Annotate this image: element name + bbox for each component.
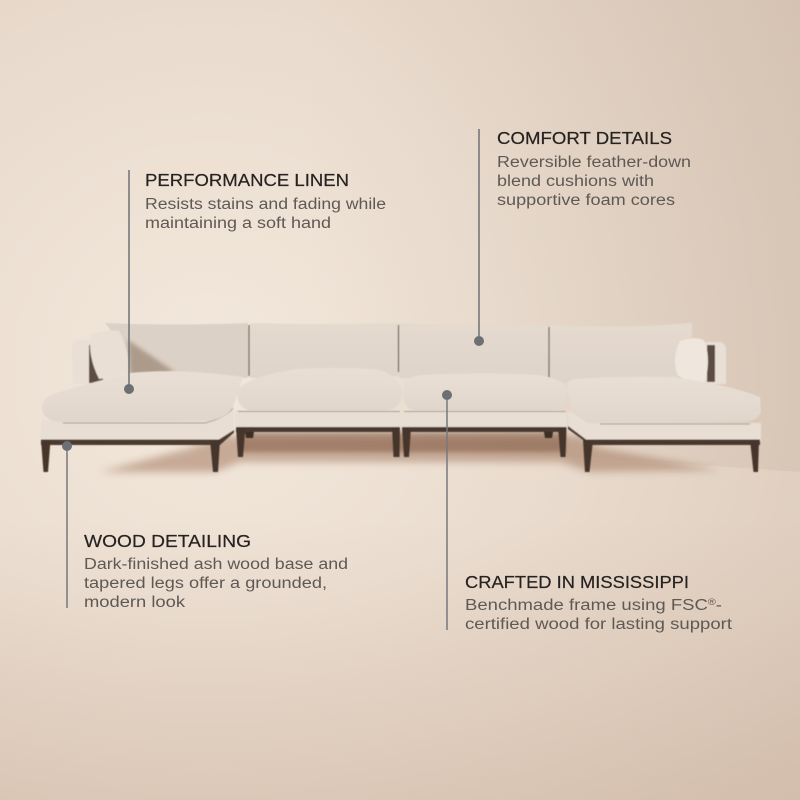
- seat shadow seams: [63, 408, 750, 424]
- seat: left chaise: [42, 371, 243, 422]
- body text: [465, 597, 733, 633]
- base: right chaise: [568, 410, 761, 441]
- right pillow: [675, 338, 708, 382]
- left pillow: [90, 330, 128, 379]
- body text: Reversible feather-down: [497, 154, 691, 171]
- body text: ®: [708, 597, 716, 607]
- callout: wood detailing: [62, 441, 348, 611]
- seat: left middle: [237, 368, 402, 410]
- leader line and dot: [474, 129, 484, 346]
- body text: Resists stains and fading while: [145, 196, 386, 213]
- wood rails: [41, 430, 234, 445]
- body text: [145, 196, 386, 232]
- right arm: [706, 342, 726, 384]
- left arm: [72, 339, 94, 384]
- leader line and dot: [442, 390, 452, 630]
- body text: -: [716, 597, 722, 614]
- heading: PERFORMANCE LINEN: [145, 170, 349, 190]
- body text: blend cushions with: [497, 173, 654, 190]
- back cushion seams: [249, 325, 549, 378]
- body text: [497, 154, 691, 209]
- base: left chaise: [41, 408, 234, 441]
- seat: right middle: [403, 374, 568, 410]
- heading: COMFORT DETAILS: [497, 128, 672, 148]
- body text: supportive foam cores: [497, 192, 675, 209]
- shadow on left back cushion: [128, 340, 175, 378]
- base: middle modules: [235, 410, 401, 428]
- sofa: [41, 323, 761, 472]
- body text: modern look: [84, 594, 185, 611]
- seat: right chaise: [567, 377, 761, 423]
- legs: [41, 427, 759, 472]
- body text: maintaining a soft hand: [145, 215, 331, 232]
- heading: WOOD DETAILING: [84, 531, 251, 551]
- body text: tapered legs offer a grounded,: [84, 575, 327, 592]
- heading: CRAFTED IN MISSISSIPPI: [465, 572, 689, 592]
- callout: crafted in mississippi: [442, 390, 733, 633]
- leader line and dot: [62, 441, 72, 608]
- leader line and dot: [124, 170, 134, 394]
- callout: performance linen: [124, 170, 386, 394]
- body text: Dark-finished ash wood base and: [84, 556, 348, 573]
- body text: certified wood for lasting support: [465, 616, 733, 633]
- callout: comfort details: [474, 128, 691, 346]
- body text: Benchmade frame using FSC: [465, 597, 668, 614]
- body text: [84, 556, 348, 611]
- floor shadow beneath sofa: [100, 432, 720, 472]
- back cushions: [105, 323, 249, 378]
